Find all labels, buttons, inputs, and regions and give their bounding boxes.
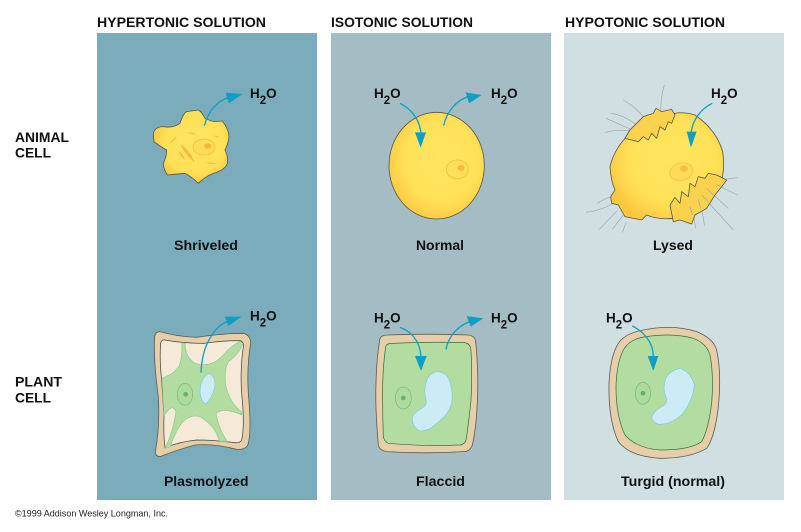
label: H2O in: H: [374, 310, 384, 326]
heading: hypertonic solution: HYPERTONIC SOLUTION: [97, 15, 266, 30]
caption: plasmolyzed: Plasmolyzed: [164, 474, 248, 489]
row label: animal cell: CELL: [15, 146, 51, 160]
label: H2O: H: [606, 310, 616, 326]
arrow: water entering normal animal cell: [400, 103, 426, 148]
label: H2O: 2: [721, 95, 727, 107]
caption: shriveled: Shriveled: [174, 238, 238, 253]
label: H2O: 2: [260, 318, 266, 330]
arrow: water entering flaccid cell: [400, 327, 427, 371]
row label: plant cell: [15, 375, 63, 406]
copyright: ©1999 Addison Wesley Longman, Inc.: [15, 508, 168, 520]
plant cell: plasmolyzed: [154, 332, 251, 457]
plant cell: turgid: [609, 327, 720, 458]
panel: hypotonic background: [564, 33, 784, 500]
heading: hypotonic solution: HYPOTONIC SOLUTION: [565, 15, 725, 30]
panel: hypertonic background: [97, 33, 317, 500]
label: H2O in: 2: [384, 95, 390, 107]
row label: animal cell: ANIMAL: [15, 130, 69, 145]
arrow: water entering turgid cell: [632, 326, 658, 371]
animal cell: shriveled: [153, 110, 229, 183]
label: H2O in: O: [390, 86, 401, 101]
row label: plant cell: CELL: [15, 390, 51, 406]
arrow: water leaving flaccid cell: [446, 316, 483, 349]
label: H2O: O: [727, 86, 738, 101]
arrow: water leaving normal animal cell: [444, 92, 482, 126]
label: H2O out: O: [507, 310, 518, 326]
heading: isotonic solution: ISOTONIC SOLUTION: [331, 15, 473, 30]
panel: isotonic background: [331, 33, 551, 500]
caption: turgid (normal): Turgid (normal): [621, 474, 725, 489]
label: H2O in: O: [390, 310, 401, 326]
label: H2O out: H: [491, 86, 501, 101]
caption: flaccid: Flaccid: [416, 474, 465, 489]
arrow: water leaving shriveled cell: [204, 93, 242, 126]
label: H2O: 2: [260, 95, 266, 107]
label: H2O in: H: [374, 86, 384, 101]
caption: lysed: Lysed: [653, 238, 693, 253]
label: H2O out: H: [491, 310, 501, 326]
row label: animal cell: [15, 130, 69, 160]
label: H2O: H: [711, 86, 721, 101]
label: H2O: O: [266, 86, 277, 101]
label: H2O out: 2: [501, 95, 507, 107]
label: H2O in: 2: [384, 320, 390, 332]
caption: normal: Normal: [416, 238, 464, 253]
arrow: water leaving plant cell: [201, 317, 242, 373]
label: H2O: H: [250, 86, 260, 101]
label: H2O out: O: [507, 86, 518, 101]
label: H2O: 2: [616, 320, 622, 332]
animal cell: normal: [389, 112, 484, 219]
row label: plant cell: PLANT: [15, 375, 63, 390]
label: H2O: H: [250, 308, 260, 324]
label: H2O: O: [622, 310, 633, 326]
plant cell: flaccid: [376, 334, 478, 453]
animal cell: lysed: [586, 85, 738, 233]
label: H2O: O: [266, 308, 277, 324]
label: H2O out: 2: [501, 320, 507, 332]
arrow: water entering lysed cell: [687, 103, 712, 148]
